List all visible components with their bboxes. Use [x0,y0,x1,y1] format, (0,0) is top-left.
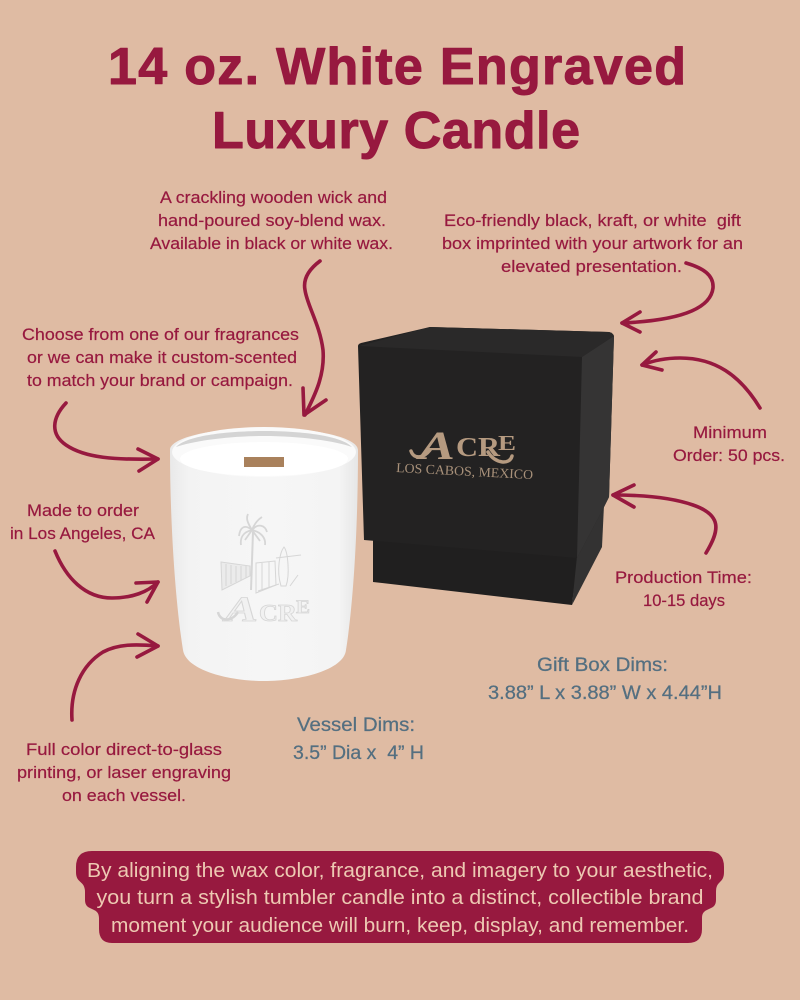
callout: gift box: box imprinted with your artwork for an [442,234,743,253]
callout: printing [17,740,231,805]
title [108,38,686,160]
vessel dimensions: Vessel Dims: [297,715,415,736]
gift box dimensions: 3.88” L x 3.88” W x 4.44”H [488,683,722,704]
box base [373,505,604,605]
candle wax [180,442,348,476]
banner text: moment your audience will burn, keep, display, and remember. [111,914,689,937]
vessel dimensions: 3.5” Dia x 4” H [293,743,424,764]
box lid [358,327,614,558]
callout: minimum order [673,423,785,465]
arrow: printing [72,634,158,720]
banner text: By aligning the wax color, fragrance, and imagery to your aesthetic, [87,859,713,882]
callout: wick and wax: hand-poured soy-blend wax. [158,211,386,230]
callout: wick and wax: Available in black or white wax. [150,234,393,253]
callout: printing: Full color direct-to-glass [26,740,222,759]
callout: made to order: Made to order [27,501,139,520]
gift box dimensions: Gift Box Dims: [537,655,668,676]
callout: wick and wax: A crackling wooden wick and [160,188,387,207]
callout: printing: on each vessel. [62,786,186,805]
gift box dimensions [488,655,722,704]
ACRE wordmark: CR [456,432,501,462]
arrow: to wick [303,261,326,415]
callout: fragrances: or we can make it custom-scented [27,348,297,367]
callout: fragrances: Choose from one of our fragrances [22,325,299,344]
callout: made to order: in Los Angeles, CA [10,524,156,543]
engraving: ACRE logo [218,589,310,629]
banner shape [76,851,724,943]
closing banner [76,851,724,943]
box logo [396,423,534,482]
candle rim [172,427,356,477]
ACRE wordmark: E [498,431,516,455]
ACRE wordmark: A [415,423,455,468]
arrow: made to order [55,551,158,602]
banner text [87,859,713,937]
callout: production time: Production Time: [615,568,752,587]
callout: production time: 10-15 days [643,591,725,610]
banner text: you turn a stylish tumbler candle into a distinct, collectible brand [96,886,704,909]
ACRE wordmark [411,423,516,468]
arrow: minimum order [642,352,760,408]
vessel dimensions [293,715,424,764]
callout: production time [615,568,752,610]
callout: gift box [442,211,743,276]
callout: printing: printing, or laser engraving [17,763,231,782]
callout: gift box: Eco-friendly black, kraft, or white gift [444,211,741,230]
callout: fragrances [22,325,299,390]
arrow: fragrances [55,403,158,471]
candle vessel [170,428,358,681]
callout: fragrances: to match your brand or campaign. [27,371,293,390]
gift box image [358,327,614,605]
callout: made to order [10,501,156,543]
arrow: production time [613,485,716,553]
title: Luxury Candle [212,102,580,160]
callout: wick and wax [150,188,393,253]
engraving: ACRE logo: E [296,597,310,618]
engraving: ACRE logo: CR [259,601,298,627]
box logo: LOS CABOS, MEXICO [396,460,534,482]
callout: minimum order: Minimum [693,423,767,442]
callout: minimum order: Order: 50 pcs. [673,446,785,465]
wooden wick [244,457,284,467]
candle image [170,427,358,681]
arrow: to gift box [622,263,713,332]
title: 14 oz. White Engraved [108,38,686,96]
callout: gift box: elevated presentation. [501,257,682,276]
engraving: ACRE logo: A [222,589,258,629]
engraving: palm and scene [221,514,301,593]
